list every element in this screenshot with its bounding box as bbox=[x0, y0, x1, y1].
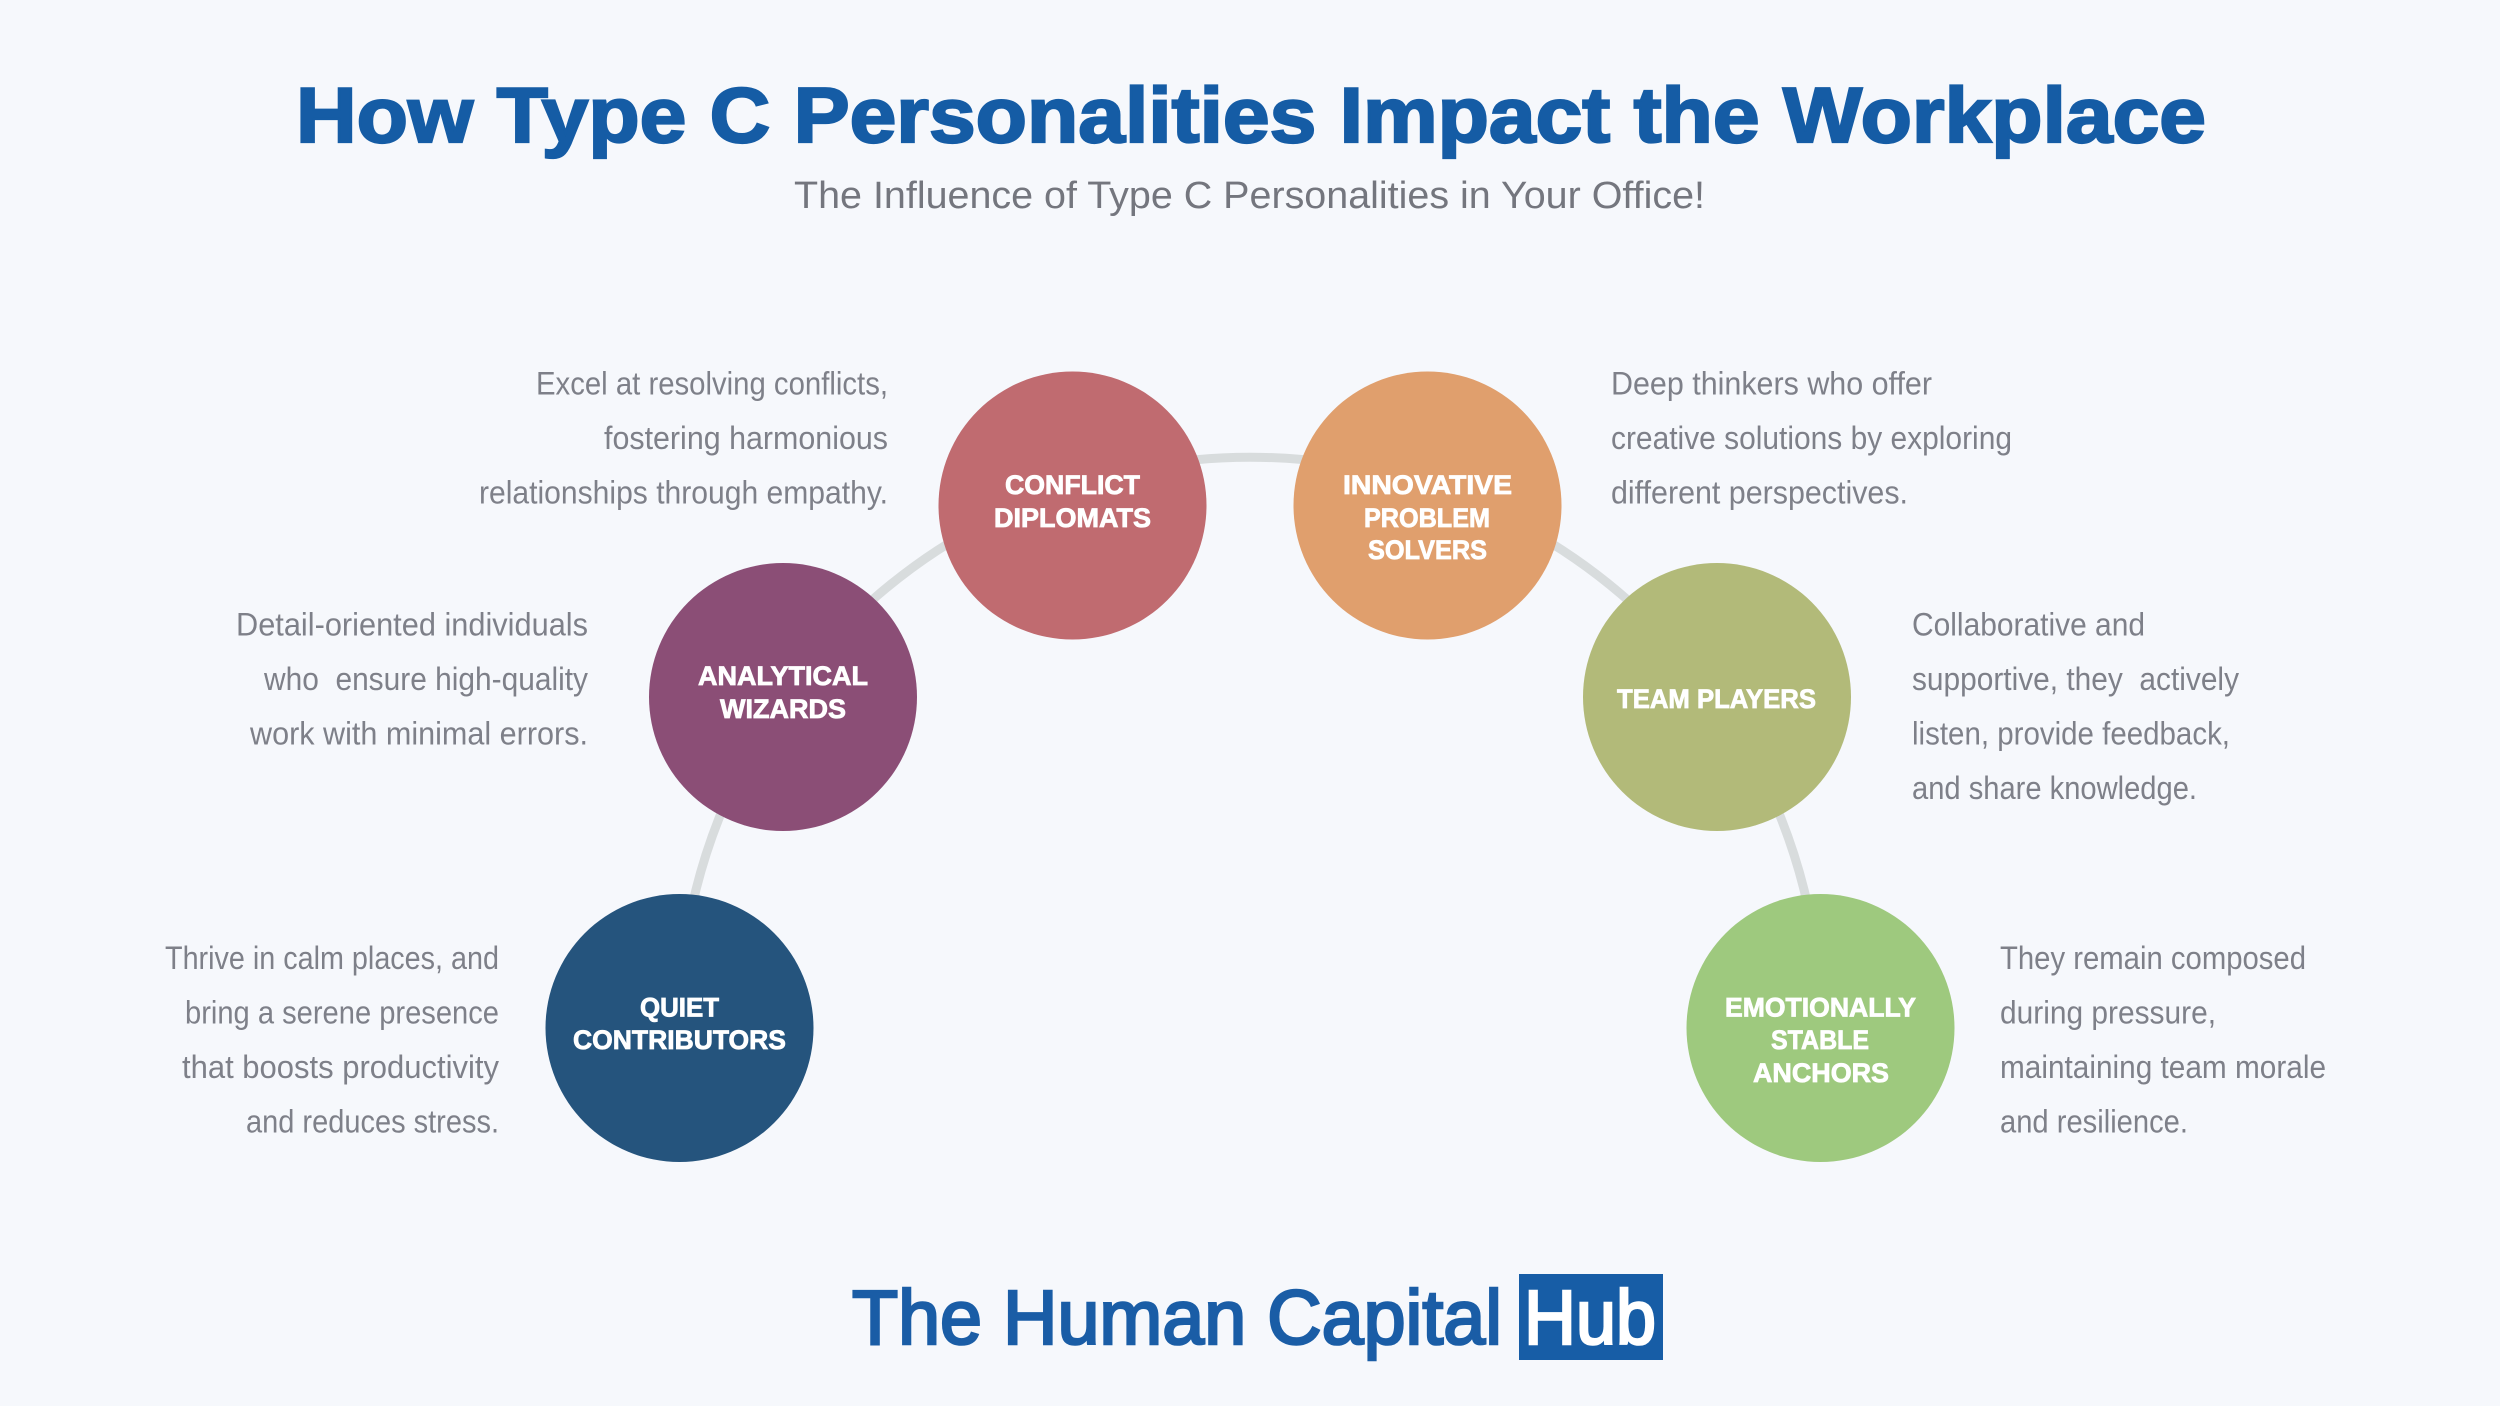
description: team players: listen, provide feedback, bbox=[1912, 716, 2230, 752]
description: quiet contributors: that boosts productivity bbox=[182, 1049, 499, 1085]
panel: team players bbox=[1583, 563, 2239, 831]
circle: team players bbox=[1583, 563, 1851, 831]
title: How Type C Personalities Impact the Workplace bbox=[296, 71, 2206, 159]
description: emotionally stable anchors: maintaining team morale bbox=[2000, 1049, 2326, 1085]
label: quiet contributors: QUIET bbox=[640, 992, 719, 1022]
label: emotionally stable anchors: STABLE bbox=[1771, 1025, 1869, 1055]
description: innovative problem solvers bbox=[1611, 366, 2012, 510]
panel: innovative problem solvers bbox=[1294, 366, 2012, 640]
circle: innovative problem solvers bbox=[1294, 372, 1562, 640]
circle: emotionally stable anchors bbox=[1686, 894, 1954, 1162]
label: conflict diplomats bbox=[994, 470, 1151, 533]
label: team players: TEAM PLAYERS bbox=[1617, 684, 1816, 714]
logo: The Human Capital Hub bbox=[852, 1274, 1663, 1361]
panel: quiet contributors bbox=[165, 894, 814, 1162]
description: conflict diplomats: fostering harmonious bbox=[604, 420, 888, 456]
label: innovative problem solvers: SOLVERS bbox=[1368, 535, 1487, 565]
label: conflict diplomats: CONFLICT bbox=[1005, 470, 1140, 500]
logo box bbox=[1519, 1274, 1663, 1360]
description: emotionally stable anchors: and resilience. bbox=[2000, 1104, 2188, 1140]
description: analytical wizards: work with minimal errors. bbox=[249, 716, 588, 752]
label: emotionally stable anchors bbox=[1725, 992, 1916, 1088]
description: team players: supportive, they actively bbox=[1912, 661, 2239, 697]
description: analytical wizards bbox=[236, 606, 588, 752]
description: quiet contributors: Thrive in calm places, and bbox=[165, 940, 499, 976]
description: emotionally stable anchors bbox=[2000, 940, 2326, 1140]
description: team players bbox=[1912, 606, 2239, 806]
description: emotionally stable anchors: They remain composed bbox=[2000, 940, 2306, 976]
description: quiet contributors: and reduces stress. bbox=[246, 1104, 499, 1140]
label: quiet contributors: CONTRIBUTORS bbox=[573, 1025, 786, 1055]
description: analytical wizards: Detail-oriented individuals bbox=[236, 606, 588, 642]
panel: conflict diplomats bbox=[479, 366, 1206, 640]
description: team players: and share knowledge. bbox=[1912, 770, 2197, 806]
label: innovative problem solvers: PROBLEM bbox=[1364, 503, 1490, 533]
description: conflict diplomats bbox=[479, 366, 888, 510]
label: analytical wizards bbox=[698, 661, 868, 724]
logo box text: Hub bbox=[1524, 1275, 1656, 1361]
description: quiet contributors bbox=[165, 940, 499, 1140]
label: emotionally stable anchors: EMOTIONALLY bbox=[1725, 992, 1916, 1022]
description: emotionally stable anchors: during pressure, bbox=[2000, 994, 2216, 1030]
label: emotionally stable anchors: ANCHORS bbox=[1753, 1058, 1889, 1088]
panel: analytical wizards bbox=[236, 563, 917, 831]
circle: analytical wizards bbox=[649, 563, 917, 831]
description: team players: Collaborative and bbox=[1912, 606, 2145, 642]
subtitle: The Influence of Type C Personalities in Your Office! bbox=[794, 175, 1705, 217]
label: conflict diplomats: DIPLOMATS bbox=[994, 503, 1151, 533]
circle: conflict diplomats bbox=[938, 372, 1206, 640]
label: analytical wizards: ANALYTICAL bbox=[698, 661, 868, 691]
label: innovative problem solvers bbox=[1343, 470, 1512, 565]
label: analytical wizards: WIZARDS bbox=[720, 694, 846, 724]
logo wordmark: The Human Capital bbox=[852, 1275, 1502, 1361]
description: conflict diplomats: relationships through empathy. bbox=[479, 474, 888, 510]
description: analytical wizards: who ensure high-quality bbox=[263, 661, 588, 697]
description: innovative problem solvers: Deep thinkers who offer bbox=[1611, 366, 1932, 402]
label: quiet contributors bbox=[573, 992, 786, 1055]
panel: emotionally stable anchors bbox=[1686, 894, 2326, 1162]
circle: quiet contributors bbox=[546, 894, 814, 1162]
label: innovative problem solvers: INNOVATIVE bbox=[1343, 470, 1512, 500]
connecting arc bbox=[679, 457, 1821, 1028]
description: conflict diplomats: Excel at resolving conflicts, bbox=[536, 366, 888, 402]
description: quiet contributors: bring a serene presence bbox=[185, 994, 499, 1030]
description: innovative problem solvers: creative solutions by exploring bbox=[1611, 420, 2012, 456]
description: innovative problem solvers: different perspectives. bbox=[1611, 474, 1908, 510]
